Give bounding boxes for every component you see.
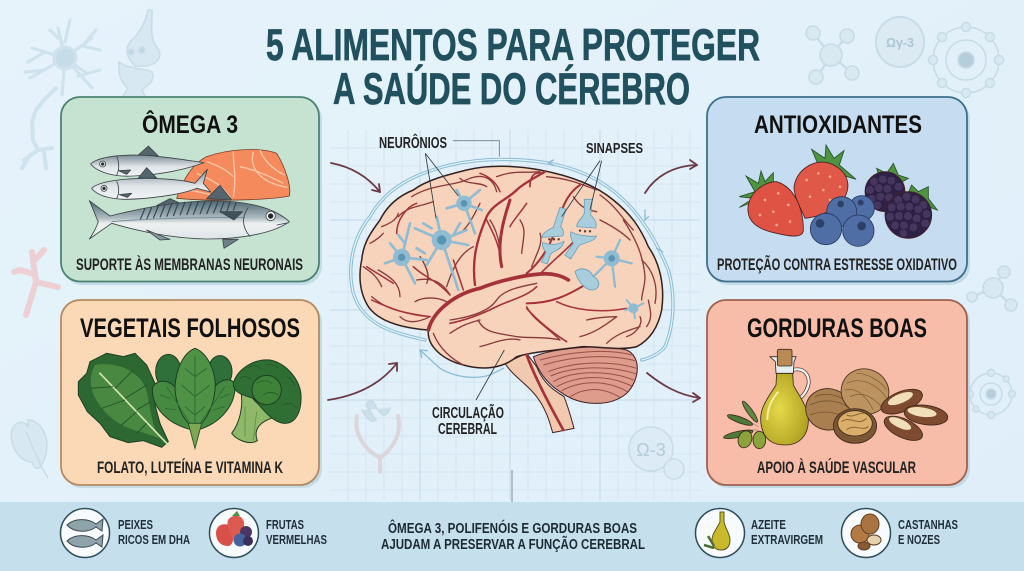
title: 5 ALIMENTOS PARA PROTEGER: [266, 21, 760, 70]
heading: vegetais folhosos: VEGETAIS FOLHOSOS: [80, 313, 300, 343]
decorative icon: pink vessel left: [14, 250, 58, 315]
label: circulação cerebral: CIRCULAÇÃO: [432, 404, 504, 422]
decorative icon: omega bubble below brain: Ω-3: [636, 440, 666, 460]
footer item: frutas: VERMELHAS: [266, 533, 327, 547]
icon: fish and salmon: [89, 146, 290, 248]
brainstem: [505, 353, 574, 433]
title: [266, 21, 760, 114]
footer item: peixes: RICOS EM DHA: [118, 533, 190, 547]
footer item: azeite: AZEITE: [751, 518, 786, 532]
arrow: antioxidants from brain: [645, 160, 697, 193]
decorative icon: omega bubble below brain: [629, 427, 684, 479]
cerebrum: [360, 166, 663, 368]
synapses: [541, 199, 599, 290]
footer message: [381, 519, 645, 553]
circulation halo: [351, 159, 673, 377]
decorative icon: omega capsule top right: Ωγ-3: [886, 35, 914, 50]
leader lines: [425, 141, 602, 400]
arrow: good fats from brain: [647, 373, 700, 402]
decorative icon: molecule top right: [806, 26, 859, 84]
panel: antioxidantes: [707, 97, 970, 285]
heading: gorduras boas: GORDURAS BOAS: [747, 313, 927, 343]
panel: ômega 3: [61, 97, 322, 285]
label: neurônios: NEURÔNIOS: [379, 134, 447, 152]
icon: olive oil and nuts: [723, 349, 949, 450]
decorative icon: atom top right: [928, 22, 1004, 98]
decorative icon: neuron top left: [22, 20, 100, 168]
footer item: azeite: EXTRAVIRGEM: [751, 533, 823, 547]
footer item: castanhas: [842, 508, 961, 558]
footer item: azeite: [696, 508, 823, 558]
decorative icon: molecule right: [967, 266, 1017, 311]
decorative icon: omega capsule top right: [876, 17, 924, 67]
blood vessels: [367, 172, 627, 430]
label: sinapses: SINAPSES: [586, 140, 643, 157]
heading: antioxidantes: ANTIOXIDANTES: [754, 111, 922, 139]
neurons: [385, 190, 643, 318]
label: circulação cerebral: CEREBRAL: [438, 421, 497, 438]
footer bar: [0, 502, 1024, 571]
decorative icon: leaf left: [11, 420, 48, 478]
panel: gorduras boas: [707, 300, 970, 488]
brain folds: [363, 172, 656, 365]
decorative icon: synapse below brain: [356, 400, 399, 472]
footer message: ÔMEGA 3, POLIFENÓIS E GORDURAS BOAS: [388, 519, 637, 537]
arrow: vegetables to brain: [328, 363, 397, 400]
caption: folato: FOLATO, LUTEÍNA E VITAMINA K: [97, 458, 283, 477]
icon: berries: [739, 145, 937, 246]
footer message: AJUDAM A PRESERVAR A FUNÇÃO CEREBRAL: [381, 535, 645, 553]
arrow: omega to brain: [331, 163, 380, 192]
footer item: castanhas: CASTANHAS: [898, 518, 958, 532]
footer item: frutas: [210, 508, 327, 558]
footer item: peixes: PEIXES: [118, 518, 153, 532]
footer item: frutas: FRUTAS: [266, 518, 304, 532]
caption: apoio: APOIO À SAÚDE VASCULAR: [757, 458, 916, 477]
label: circulação cerebral: [432, 404, 504, 438]
footer item: castanhas: E NOZES: [898, 533, 940, 547]
decorative icon: atom right: [966, 370, 1016, 418]
footer item: peixes: [60, 508, 190, 558]
title: A SAÚDE DO CÉREBRO: [333, 64, 690, 114]
heading: ômega 3: ÔMEGA 3: [142, 109, 238, 139]
panel: vegetais folhosos: [61, 300, 322, 488]
decorative icon: synapse top left: [119, 10, 160, 98]
icon: leafy greens: [78, 348, 301, 448]
brain illustration: [351, 141, 673, 433]
cerebellum: [533, 347, 637, 403]
caption: suporte: SUPORTE ÀS MEMBRANAS NEURONAIS: [76, 255, 303, 274]
